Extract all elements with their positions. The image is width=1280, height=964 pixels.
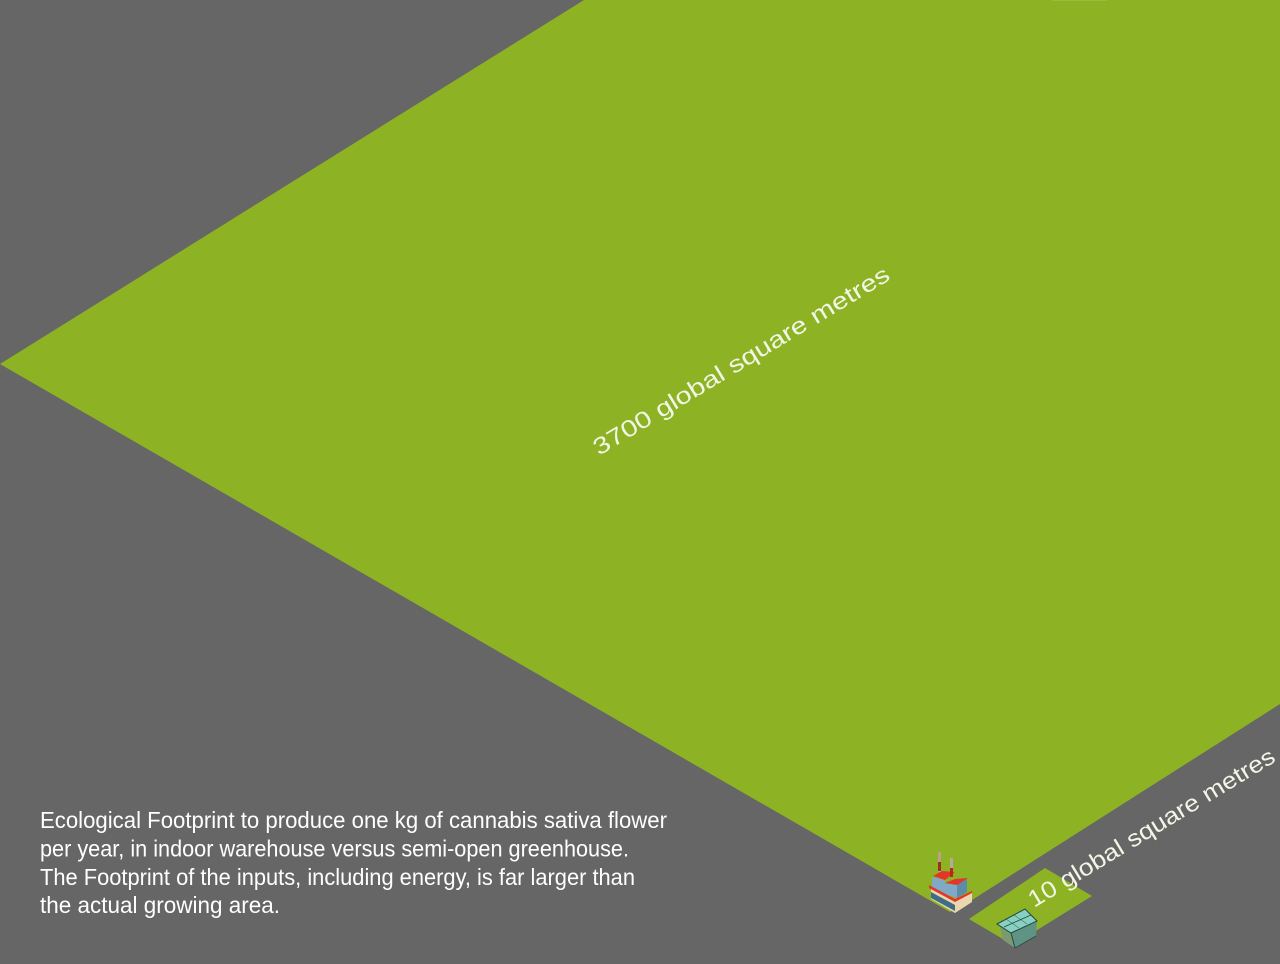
icon: factory — [929, 852, 972, 913]
description text block: The Footprint of the inputs, including energy, is far larger than — [40, 864, 635, 890]
description text block: per year, in indoor warehouse versus semi-open greenhouse. — [40, 836, 629, 862]
description text block: Ecological Footprint to produce one kg of cannabis sativa flower — [40, 807, 667, 833]
label: 10 global square metres: 10 global square metres — [1023, 743, 1280, 912]
greenhouse footprint: small green area — [969, 868, 1092, 945]
description text block: the actual growing area. — [40, 892, 280, 918]
label: 3700 global square metres: 3700 global square metres — [588, 261, 894, 460]
description text block — [40, 807, 667, 918]
icon: greenhouse — [997, 909, 1037, 948]
